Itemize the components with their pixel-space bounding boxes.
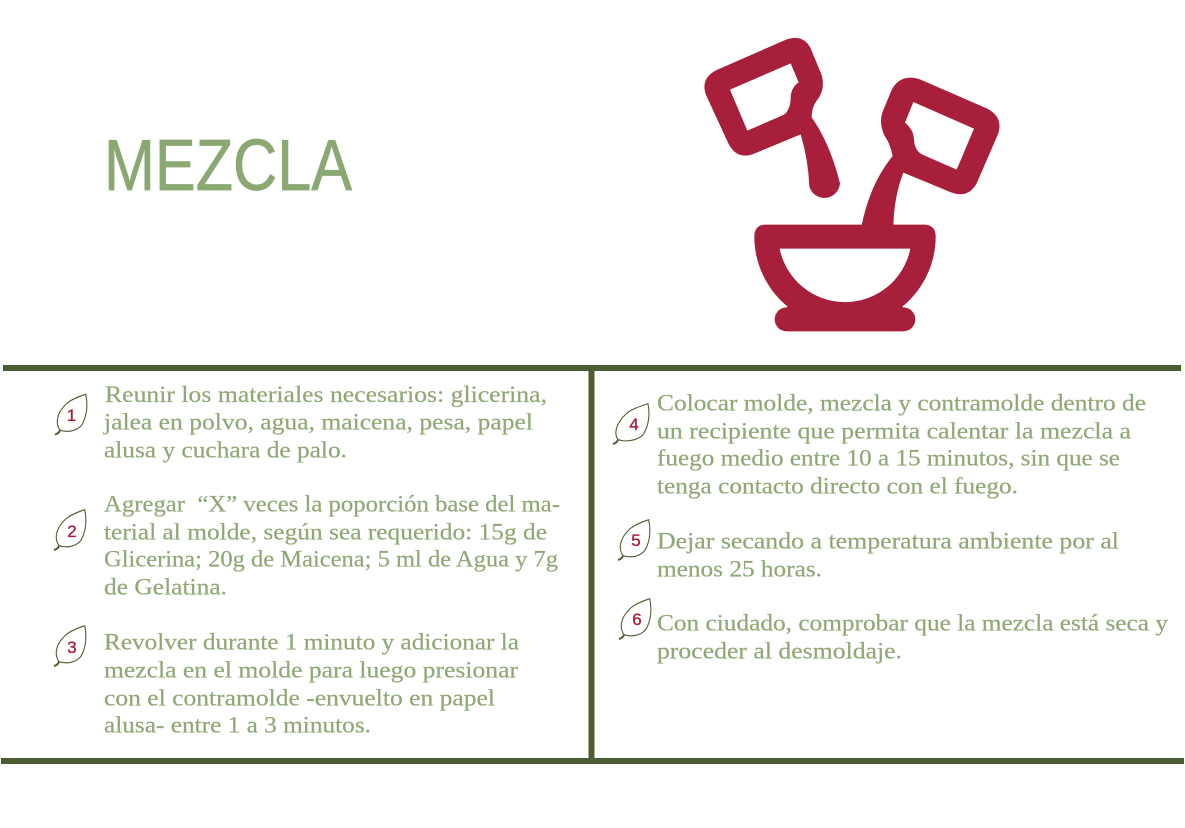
text: step 1: jalea en polvo, agua, maicena, pesa, papel <box>103 410 533 434</box>
icon: leaf number 2: 2 <box>67 522 77 541</box>
icon: leaf number 3 <box>54 626 86 666</box>
icon: leaf number 3: 3 <box>67 638 77 657</box>
text: step 6: proceder al desmoldaje. <box>657 638 902 663</box>
icon: leaf number 6: 6 <box>632 610 642 629</box>
icon: leaf number 4: 4 <box>629 415 639 434</box>
title: MEZCLA <box>104 126 352 206</box>
step 3 <box>54 626 519 737</box>
column divider <box>588 369 594 762</box>
step 4 <box>613 390 1146 498</box>
icon: leaf number 1: 1 <box>67 406 76 425</box>
text: step 2: terial al molde, según sea requerido: 15g de <box>104 519 547 544</box>
icon: leaf number 6 <box>619 599 651 639</box>
text: step 4: Colocar molde, mezcla y contramolde dentro de <box>657 390 1146 415</box>
text: step 2: de Gelatina. <box>104 574 227 599</box>
step 6 <box>619 599 1169 663</box>
icon: two cups pouring into bowl <box>704 38 999 331</box>
text: step 3: Revolver durante 1 minuto y adicionar la <box>104 629 519 654</box>
text: step 4: fuego medio entre 10 a 15 minutos, sin que se <box>657 445 1120 470</box>
text: step 3: mezcla en el molde para luego presionar <box>104 657 518 682</box>
text: step 4: un recipiente que permita calentar la mezcla a <box>657 418 1131 443</box>
icon: leaf number 1 <box>55 394 87 434</box>
icon: leaf number 5: 5 <box>631 531 641 550</box>
text: step 5: Dejar secando a temperatura ambiente por al <box>657 528 1119 553</box>
text: step 2: Agregar “X” veces la poporción base del ma- <box>104 491 560 516</box>
step 2 <box>54 491 560 599</box>
icon: leaf number 2 <box>54 510 86 550</box>
top divider <box>3 365 1181 371</box>
text: step 3: alusa- entre 1 a 3 minutos. <box>104 712 371 737</box>
text: step 6: Con ciudado, comprobar que la mezcla está seca y <box>657 610 1169 635</box>
text: step 2: Glicerina; 20g de Maicena; 5 ml de Agua y 7g <box>104 546 559 571</box>
step 5 <box>618 520 1119 581</box>
icon: leaf number 4 <box>613 404 649 444</box>
text: step 1: alusa y cuchara de palo. <box>104 437 347 462</box>
bottom divider <box>1 758 1184 764</box>
text: step 3: con el contramolde -envuelto en papel <box>104 685 495 710</box>
text: step 1: Reunir los materiales necesarios: glicerina, <box>105 382 547 407</box>
text: step 5: menos 25 horas. <box>657 556 822 581</box>
step 1 <box>55 382 547 462</box>
icon: leaf number 5 <box>618 520 650 560</box>
text: step 4: tenga contacto directo con el fuego. <box>657 473 1018 498</box>
